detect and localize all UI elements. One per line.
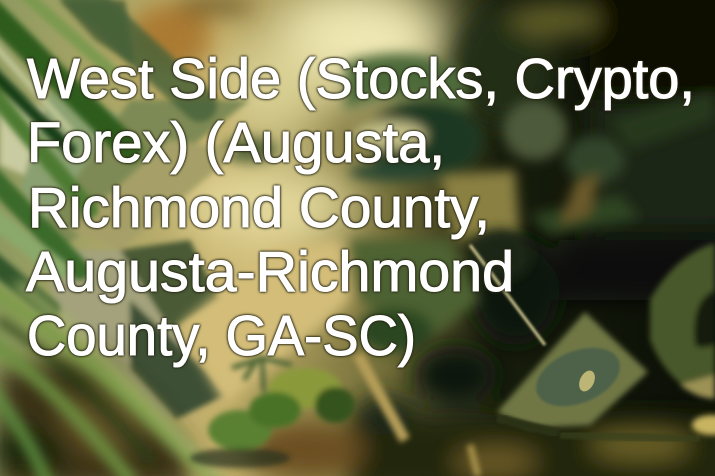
banknote strip left	[0, 0, 250, 420]
tan streak under portrait	[358, 355, 478, 476]
title: West Side (Stocks, Crypto, Forex) (Augusta, Richmond County, Augusta-Richmond County, GA-SC): Forex) (Augusta,	[27, 111, 445, 175]
orange-brown blur at top	[128, 0, 255, 123]
bottom dark olive band	[245, 345, 715, 476]
title: West Side (Stocks, Crypto, Forex) (Augusta, Richmond County, Augusta-Richmond County, GA-SC)	[26, 47, 695, 368]
leaf blades upper left	[0, 0, 200, 310]
blurred leaves lower left	[0, 285, 215, 476]
portrait eye	[222, 54, 625, 184]
title: West Side (Stocks, Crypto, Forex) (Augusta, Richmond County, Augusta-Richmond County, GA-SC): West Side (Stocks, Crypto,	[27, 47, 695, 111]
small banknote with seal	[497, 312, 700, 440]
title: West Side (Stocks, Crypto, Forex) (Augusta, Richmond County, Augusta-Richmond County, GA-SC): Augusta-Richmond	[26, 240, 514, 304]
pale banknote glow	[180, 0, 450, 330]
rolled note on the right	[650, 243, 715, 435]
foliage right of the eye	[440, 90, 715, 240]
title: West Side (Stocks, Crypto, Forex) (Augusta, Richmond County, Augusta-Richmond County, GA-SC): County, GA-SC)	[27, 304, 416, 368]
blurred dark ground lower left	[0, 350, 190, 476]
title: West Side (Stocks, Crypto, Forex) (Augusta, Richmond County, Augusta-Richmond County, GA-SC): Richmond County,	[28, 176, 490, 240]
dark upper right	[455, 0, 715, 345]
icon: palm trees and shrubs	[190, 358, 355, 468]
tan note lower centre	[180, 229, 532, 405]
